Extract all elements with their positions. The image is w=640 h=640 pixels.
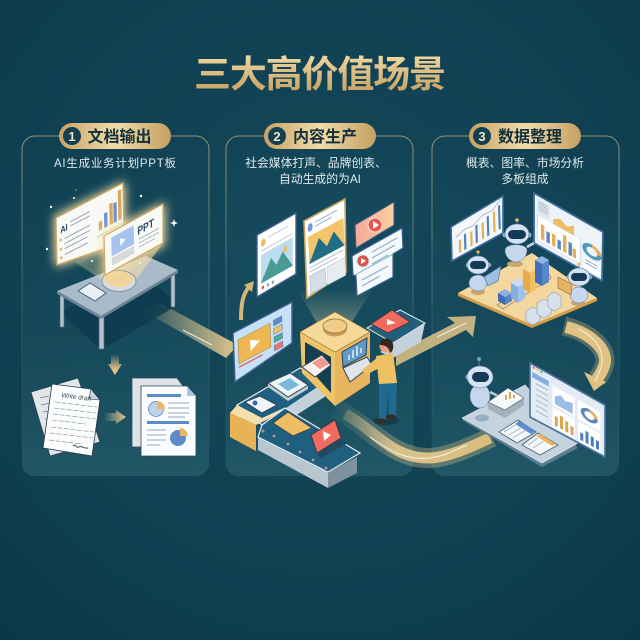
robot: right: [558, 262, 592, 306]
screen: AI document: [54, 181, 126, 267]
icon: finished report: [132, 378, 196, 456]
heading pill: 文档输出: 文档输出: [87, 127, 152, 146]
icon: handwritten drafts: Write draft: [61, 392, 93, 403]
document: gold header: [522, 433, 558, 455]
heading pill: 内容生产: [264, 123, 376, 149]
item: pink card: [302, 355, 331, 377]
table shadow: [60, 270, 178, 350]
arrow: curve from conveyor to bottom platform: [335, 408, 492, 458]
illustration: bottom desk with dashboard: [462, 357, 605, 467]
illustration: video card: [355, 202, 394, 248]
illustration: dashboard board: [534, 193, 603, 281]
text: panel 3 description: 概表、图率、市场分析: [466, 156, 584, 170]
heading pill: 文档输出: [59, 123, 171, 149]
illustration: gold platform with charts: [458, 218, 597, 328]
item: picture stack: [268, 373, 308, 401]
arrow: flow from desk to conveyor: [142, 303, 238, 358]
robot: left: [466, 250, 501, 295]
illustration: social card one: [257, 213, 296, 297]
light rays above machine: [298, 290, 372, 325]
sparkles: [46, 189, 178, 264]
bars: grey cubes: [526, 292, 561, 325]
text: panel 1 description: AI生成业务计划PPT板: [54, 156, 176, 170]
illustration: data chart board: [451, 196, 503, 261]
tablet: [78, 283, 106, 301]
text: panel 3 description: 多板组成: [501, 172, 549, 186]
table top: [57, 256, 178, 316]
bar: gold: [523, 264, 537, 293]
title: 三大高价值场景: [194, 54, 446, 95]
illustration: video window: [233, 302, 292, 382]
screen: PPT document: PPT: [137, 216, 155, 238]
item: blue document: [245, 396, 277, 413]
screen: AI document: AI: [60, 221, 68, 236]
paper stack: [488, 388, 524, 418]
upper conveyor: [237, 368, 332, 425]
panel: 文档输出: [22, 123, 209, 476]
projector disc: [102, 270, 136, 292]
machine: [300, 312, 372, 406]
light beam: [75, 238, 136, 280]
heading pill: 内容生产: 2: [273, 129, 281, 144]
robot: centre: [502, 218, 534, 267]
desk: [462, 385, 578, 467]
illustration: post card: [352, 228, 403, 296]
robot: bottom: [465, 357, 498, 408]
illustration: conveyor and machine: [230, 310, 425, 488]
arrow: conveyor to data platform: [396, 316, 476, 366]
heading pill: 数据整理: [469, 123, 581, 149]
panel: 数据整理: [432, 123, 619, 476]
bar: blue: [535, 256, 549, 286]
right conveyor: [367, 310, 425, 358]
gold belt end: [230, 405, 287, 451]
heading pill: 文档输出: 1: [68, 129, 76, 144]
illustration: operator: [362, 338, 399, 425]
lower conveyor: [258, 408, 360, 488]
heading pill: 数据整理: 3: [478, 129, 486, 144]
illustration: social card two: [304, 199, 346, 298]
screen: PPT document: [102, 202, 165, 277]
arrow: down to documents: [108, 355, 122, 375]
heading pill: 内容生产: 内容生产: [293, 127, 357, 146]
bar: light blue: [511, 278, 525, 303]
table legs: [60, 272, 175, 349]
text: panel 2 description: 自动生成的为AI: [279, 172, 361, 186]
heading pill: 数据整理: 数据整理: [498, 128, 562, 146]
chart guide: [497, 274, 551, 309]
text: panel 2 description: 社会媒体打声、品牌创表、: [245, 156, 387, 170]
screen: analytics dashboard: [530, 363, 605, 457]
arrow: right to finished report: [105, 410, 126, 424]
arrow: curved up to social cards: [241, 281, 254, 320]
icon: handwritten drafts: [31, 378, 100, 456]
bar: dark blue cube: [498, 289, 512, 305]
panel: 内容生产: [226, 123, 413, 476]
item: gold card: [273, 412, 312, 436]
item: red laptop: [311, 420, 348, 458]
arrow: curve from platform to dashboard: [564, 326, 606, 391]
illustration: projected documents over desk: [46, 181, 178, 350]
document: blue header: [499, 420, 536, 443]
